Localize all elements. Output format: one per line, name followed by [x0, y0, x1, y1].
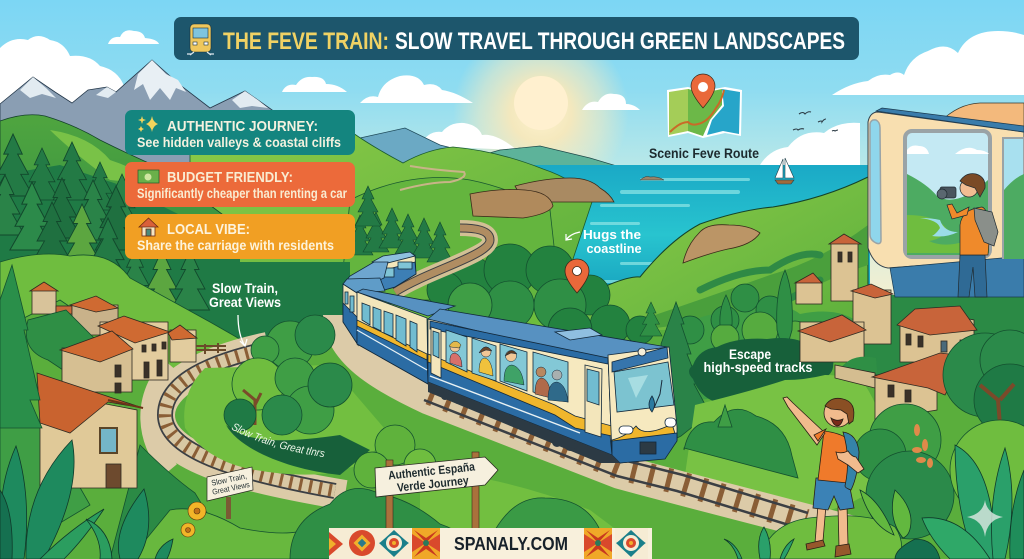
bubble behind label: escape — [689, 338, 833, 401]
footer text: SPANALY.COM — [454, 534, 568, 554]
bush beside the track — [684, 405, 798, 478]
title text continued: SLOW TRAVEL THROUGH GREEN LANDSCAPES — [395, 28, 845, 55]
label: hugs the coastline: Hugs the — [583, 227, 641, 242]
village lane — [149, 365, 170, 470]
label: scenic feve route: Scenic Feve Route — [649, 146, 759, 161]
dark forest behind the curve — [117, 249, 350, 354]
label: escape high-speed tracks: high-speed tracks — [704, 360, 812, 375]
icon: birds — [793, 112, 838, 131]
distant blue mountain — [360, 128, 600, 172]
panel: local vibe: LOCAL VIBE: — [167, 221, 250, 238]
sun glow — [453, 24, 629, 200]
cliff on right hillside — [683, 225, 760, 263]
distant teal hill — [465, 146, 650, 190]
panel: authentic journey: AUTHENTIC JOURNEY: — [167, 118, 318, 135]
window view — [905, 131, 990, 257]
big direction signpost — [375, 452, 498, 530]
mid trees inside left curve — [224, 315, 352, 435]
small signpost: Slow Train, — [211, 471, 248, 488]
tiles right — [584, 528, 648, 559]
icon: sailboat — [775, 158, 794, 184]
label: slow train great views: Slow Train, — [212, 281, 278, 296]
small signpost — [207, 467, 253, 519]
foreground leaves left — [0, 440, 173, 559]
conifers to the right of the panels — [347, 186, 453, 262]
icon: watermark star — [967, 500, 1003, 537]
panel: budget friendly: BUDGET FRIENDLY: — [167, 169, 293, 186]
carriage top — [940, 103, 1024, 129]
second car — [357, 289, 455, 384]
label: hugs the coastline — [583, 227, 642, 256]
dark band for curved text — [226, 425, 370, 475]
left hill and forest — [0, 115, 240, 305]
left village houses — [26, 282, 226, 488]
panel: local vibe — [125, 214, 355, 259]
panel: train window with photographer — [868, 103, 1024, 297]
sky background — [0, 0, 1024, 300]
left gravel — [160, 347, 345, 495]
right village — [795, 234, 1024, 420]
middle hills — [190, 122, 593, 319]
small signpost: Great Views — [211, 480, 250, 497]
left curved track — [165, 351, 335, 491]
center bushes beyond the train — [427, 244, 654, 352]
right slope bushes and conifers — [640, 270, 860, 444]
label: escape high-speed tracks — [704, 347, 812, 375]
windows and passengers — [446, 330, 568, 402]
big direction signpost: Verde Journey — [396, 473, 470, 495]
icon: route map with pin — [667, 74, 742, 138]
title bar — [174, 17, 859, 60]
hiker — [783, 397, 864, 557]
curved label: slow train great views: Slow Train, Great tlnrs — [232, 424, 325, 457]
front car body — [428, 309, 677, 463]
title text: THE FEVE TRAIN: — [223, 28, 389, 55]
carriage lower panel — [890, 256, 1024, 297]
foreground leaves right — [724, 424, 1024, 559]
green ground lower left — [0, 365, 390, 559]
icon: house — [139, 218, 158, 236]
label: escape high-speed tracks: Escape — [729, 347, 771, 362]
cliffs — [470, 178, 614, 274]
right green hillside — [555, 177, 868, 350]
clouds — [0, 30, 1024, 165]
icon: sparkles — [138, 116, 158, 132]
left big conifer — [0, 265, 42, 428]
label: slow train great views: Great Views — [209, 295, 281, 310]
banner: spanaly footer — [329, 528, 652, 559]
undercarriage — [428, 382, 620, 463]
tiles left — [329, 528, 440, 559]
main gravel — [340, 315, 880, 540]
panel: authentic journey: See hidden valleys & coastal cliffs — [137, 135, 341, 150]
third car — [343, 278, 385, 345]
ocean — [530, 165, 870, 305]
big direction signpost: Authentic España — [387, 459, 476, 483]
gravel path and tracks — [149, 228, 880, 540]
big stone house — [37, 373, 143, 488]
door — [431, 327, 441, 378]
main track — [424, 386, 808, 529]
label: slow train great views — [209, 281, 281, 310]
photographer — [937, 174, 998, 297]
panel: local vibe: Share the carriage with residents — [137, 238, 334, 253]
lower-center bushes — [290, 425, 630, 559]
pin: hugs the coastline — [565, 259, 589, 293]
upper track — [395, 228, 490, 292]
panel: authentic journey — [125, 110, 355, 155]
panel: budget friendly — [125, 162, 355, 207]
arrow: hugs the coastline — [566, 232, 580, 240]
panel: budget friendly: Significantly cheaper than renting a car — [137, 186, 348, 201]
rear cars — [345, 252, 416, 292]
right trees — [760, 330, 1024, 559]
arrow: slow train — [238, 315, 247, 346]
bright mound above the village — [0, 254, 258, 375]
mountains — [0, 60, 290, 165]
bright meadow near hiker — [685, 375, 895, 515]
icon: train — [187, 24, 214, 55]
icon: banknote — [138, 170, 159, 183]
icon: yellow flowers — [181, 502, 206, 537]
front face — [608, 347, 677, 463]
carriage wall — [868, 112, 1024, 268]
label: hugs the coastline: coastline — [586, 241, 642, 256]
train — [343, 252, 677, 463]
lower landscape base — [0, 275, 1024, 559]
